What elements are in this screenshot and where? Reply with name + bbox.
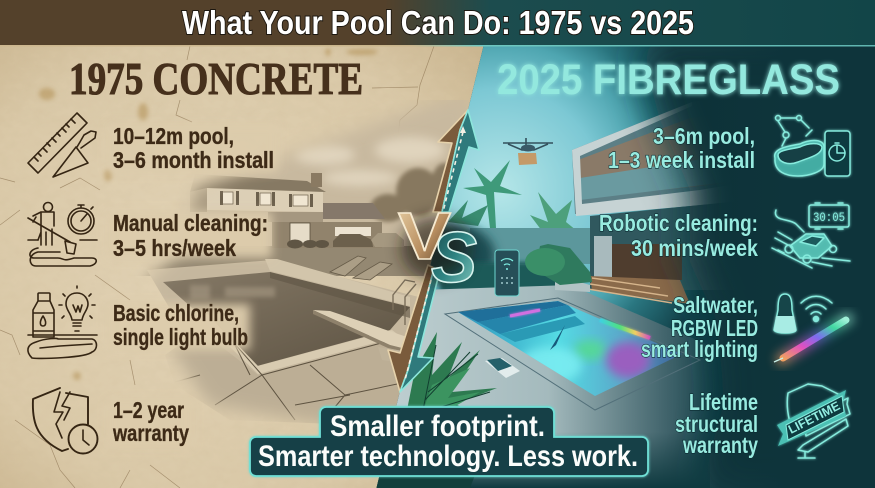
text: lifetime warranty: [675, 389, 758, 458]
dark right panel shading: [370, 46, 875, 488]
illustration: foreground tropical leaves: [376, 332, 497, 488]
callout: smaller footprint, smarter technology: [250, 407, 648, 476]
heading: 1975 concrete: 1975 CONCRETE: [69, 53, 363, 104]
callout: smaller footprint, smarter technology: Smarter technology. Less work.: [258, 440, 638, 473]
icon: ruler and trowel: [28, 113, 96, 177]
text: robotic cleaning: Robotic cleaning:: [599, 210, 758, 236]
icon: delivery drone: [503, 138, 553, 165]
text: warranty 1975: [112, 397, 189, 446]
panel: 2025 fibreglass side: [376, 46, 718, 488]
icon: pool controller pad: [485, 358, 520, 378]
text: pool size 2025: [608, 123, 755, 173]
text: chlorine and bulb: [113, 300, 248, 350]
text: manual cleaning: 3–5 hrs/week: [113, 235, 237, 261]
illustration: 1975 house and concrete pool: [130, 100, 490, 425]
arrow: lower head: [388, 265, 440, 392]
text: robotic cleaning: 30 mins/week: [631, 235, 759, 261]
text: lifetime warranty: warranty: [682, 432, 758, 458]
text: saltwater and LED: smart lighting: [641, 336, 758, 362]
text: lifetime warranty: structural: [675, 411, 758, 437]
arrow: upper head: [433, 110, 479, 212]
icon: manual cleaning and stopwatch: [28, 202, 97, 266]
text: warranty 1975: warranty: [112, 420, 189, 446]
header bar: [0, 0, 875, 46]
icon: robot cleaner and digital timer: 30:05: [813, 210, 845, 225]
text: warranty 1975: 1–2 year: [113, 397, 184, 423]
heading: 2025 fibreglass: 2025 FIBREGLASS: [497, 56, 840, 104]
text: saltwater and LED: Saltwater,: [673, 292, 758, 318]
callout: smaller footprint, smarter technology: Smaller footprint.: [330, 410, 545, 443]
icon: lifetime shield badge and steel beam: [777, 384, 850, 458]
icon: lifetime shield badge and steel beam: LIFETIME: [786, 399, 842, 437]
text: chlorine and bulb: Basic chlorine,: [113, 300, 239, 326]
icon: robot cleaner and digital timer: [772, 203, 850, 268]
panel: 1975 concrete parchment side: [0, 46, 490, 488]
text: chlorine and bulb: single light bulb: [113, 324, 248, 350]
text: pool size 1975: 3–6 month install: [113, 147, 274, 173]
text: manual cleaning: Manual cleaning:: [113, 210, 268, 236]
text: robotic cleaning: [599, 210, 759, 261]
VS badge: S: [431, 219, 477, 298]
text: manual cleaning: [113, 210, 268, 261]
VS badge: V: [398, 199, 451, 274]
illustration: modern house: [572, 104, 718, 304]
illustration: palms and garden: [430, 160, 590, 290]
icon: cracked shield and clock: [33, 388, 98, 454]
VS badge: [398, 199, 477, 298]
arrow: double-headed divider: [388, 110, 479, 392]
text: saltwater and LED: RGBW LED: [671, 315, 758, 341]
text: pool size 1975: [113, 123, 274, 173]
text: pool size 2025: 1–3 week install: [608, 147, 755, 173]
icon: chlorine bottle and light bulb: [28, 286, 97, 358]
illustration: pool deck: [376, 244, 720, 488]
text: saltwater and LED: [641, 292, 758, 362]
icon: robotic arm, pool and phone: [775, 116, 850, 176]
text: pool size 1975: 10–12m pool,: [113, 123, 234, 149]
icon: salt shaker, wifi and RGB LED strip: [774, 294, 847, 362]
icon: smartphone with wifi on wall: [495, 250, 519, 296]
text: lifetime warranty: Lifetime: [689, 389, 758, 415]
text: pool size 2025: 3–6m pool,: [653, 123, 755, 149]
title: What Your Pool Can Do: 1975 vs 2025: [182, 4, 694, 41]
